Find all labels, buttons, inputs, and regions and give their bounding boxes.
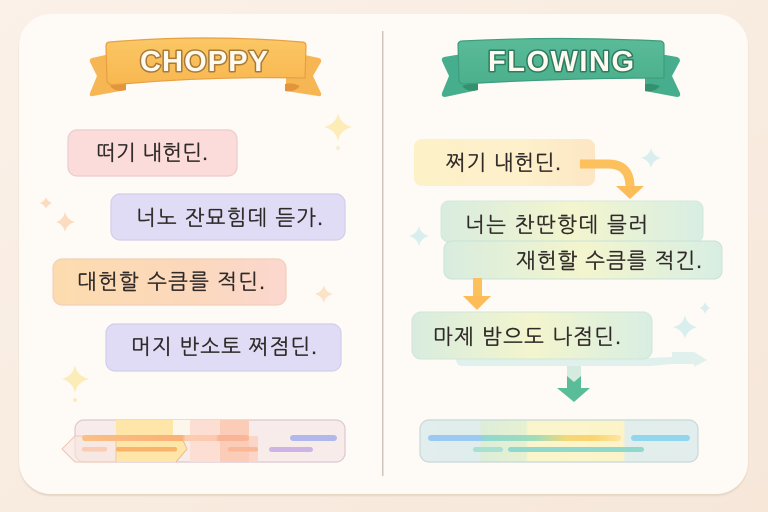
choppy bubble 2 — [111, 194, 345, 240]
faint side arrow — [456, 352, 707, 367]
choppy rhythm strip — [62, 420, 345, 462]
flowing bubble 3 — [412, 312, 652, 359]
banner title: FLOWING — [488, 46, 634, 78]
sparkles: flowing side — [409, 148, 710, 339]
choppy bubble 1 — [68, 130, 237, 176]
flowing bubble 3: 마제 밤으도 나점딘. — [433, 326, 621, 349]
choppy bubble 4: 머지 반소토 쩌점딘. — [131, 336, 317, 359]
flowing bubble 2 continuation: 재헌할 수큼를 적긴. — [516, 250, 702, 273]
banner: FLOWING — [442, 38, 680, 97]
flowing bubble 2 — [441, 201, 703, 242]
choppy bubble 2: 너노 잔묘힘데 듣가. — [136, 207, 323, 230]
flowing bubble 1 — [414, 139, 595, 186]
choppy bubble 1: 떠기 내헌딘. — [96, 142, 208, 165]
flowing bubble 1: 쩌기 내헌딘. — [446, 152, 561, 175]
choppy bubble 3: 대헌할 수큼를 적딘. — [77, 271, 265, 294]
curved arrow: bubble 1 to 2 — [580, 164, 644, 199]
banner: CHOPPY — [90, 38, 321, 96]
choppy bubble 4 — [106, 324, 341, 371]
flowing bubble 2: 너는 찬딴항데 믈러 — [465, 214, 648, 237]
flowing bubble 2 continuation — [444, 241, 722, 279]
sparkles: choppy side — [40, 113, 352, 402]
banner title: CHOPPY — [140, 46, 268, 78]
arrow: bubble 2 to 3 — [463, 278, 491, 310]
flowing rhythm strip — [420, 420, 698, 462]
choppy bubble 3 — [53, 259, 286, 305]
center divider — [382, 31, 384, 476]
arrow: down to strip — [557, 366, 590, 402]
